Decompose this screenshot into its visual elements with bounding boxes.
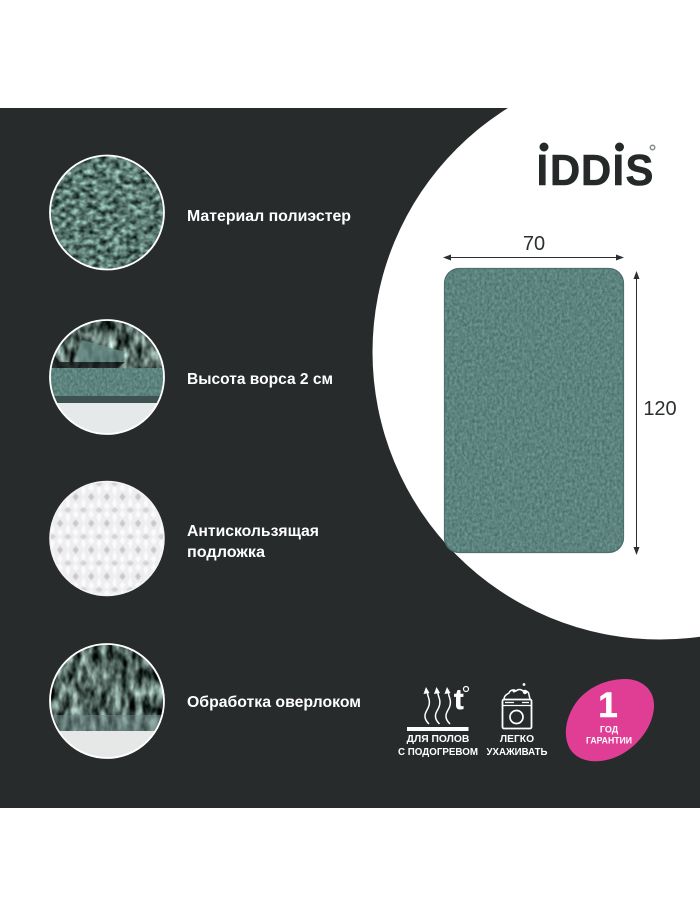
badge: 1 year warranty: ГОД: [600, 724, 619, 734]
easy care label: ЛЕГКО: [500, 734, 534, 745]
white circular area: [372, 64, 700, 640]
dimension: height 120: 120: [643, 398, 677, 420]
easy care label: УХАЖИВАТЬ: [486, 747, 548, 758]
heated floor label: [398, 734, 478, 758]
feature 1 label: Материал полиэстер: [187, 208, 351, 225]
feature 4 label: Обработка оверлоком: [187, 694, 361, 711]
dimension: width 70: [443, 233, 624, 260]
icon: heated floor: [407, 684, 468, 731]
heated floor label: ДЛЯ ПОЛОВ: [407, 734, 469, 745]
icon: washing machine: [502, 683, 532, 728]
feature 4: overlock edge photo: [48, 643, 166, 761]
badge: 1 year warranty: [566, 679, 654, 761]
feature 3 label: [187, 523, 319, 561]
feature 2: pile height photo: [48, 318, 166, 437]
dimension: height 120: [634, 271, 677, 555]
easy care label: [486, 734, 548, 758]
badge: 1 year warranty: ГАРАНТИИ: [586, 736, 632, 746]
feature 3 label: подложка: [187, 544, 265, 561]
badge: 1 year warranty: 1: [598, 686, 618, 725]
feature 3 label: Антискользящая: [187, 523, 319, 540]
feature 3: anti-slip backing photo: [48, 480, 166, 598]
bath mat photo: [444, 268, 624, 553]
feature 1: material photo: [48, 154, 166, 272]
heated floor label: С ПОДОГРЕВОМ: [398, 747, 478, 758]
dark background panel: [0, 108, 700, 808]
dimension: width 70: 70: [523, 233, 545, 255]
feature 2 label: Высота ворса 2 см: [187, 371, 333, 388]
icon: heated floor: t: [454, 684, 464, 716]
logo: IDDIS: IDDIS: [536, 146, 653, 195]
